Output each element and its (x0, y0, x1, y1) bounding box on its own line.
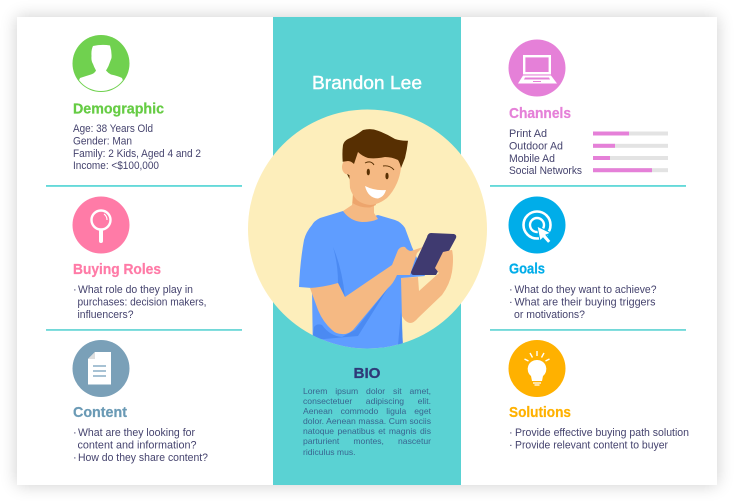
questions text: content and information? (78, 440, 196, 452)
heading: Solutions (509, 404, 571, 421)
bio paragraph: consectetuer adipiscing elit. (303, 396, 431, 406)
solutions text: Provide effective buying path solution (515, 427, 689, 439)
hand on tablet (435, 250, 453, 283)
section: channels (508, 40, 668, 177)
questions text (73, 427, 208, 464)
section: buying roles (72, 196, 206, 321)
icon: person (72, 35, 130, 95)
neck (343, 194, 378, 222)
channel labels: Social Networks (509, 165, 582, 177)
solutions text: · (509, 427, 513, 439)
details text: Family: 2 Kids, Aged 4 and 2 (73, 148, 201, 160)
section: content (72, 340, 208, 464)
channel labels: Mobile Ad (509, 153, 555, 165)
portrait circle with character (248, 110, 487, 360)
questions text: What are their buying triggers (514, 296, 656, 308)
icon: document (72, 340, 130, 397)
questions text: · (509, 284, 513, 296)
bio paragraph: Aenean commodo ligula eget (303, 406, 431, 416)
section: demographic (72, 35, 201, 172)
channel labels: Outdoor Ad (509, 140, 563, 152)
rear arm (400, 250, 453, 323)
bio paragraph: dolor. Aenean massa. Cum sociis (303, 416, 431, 426)
questions text (73, 284, 206, 321)
heading: Demographic (73, 100, 164, 118)
questions text: What do they want to achieve? (514, 284, 656, 296)
tablet (411, 233, 456, 275)
questions text: · (509, 296, 513, 308)
questions text: What role do they play in (78, 284, 193, 296)
name heading: Brandon Lee (312, 72, 422, 93)
heading: Content (73, 404, 127, 421)
details text: Income: <$100,000 (73, 160, 159, 172)
front arm (310, 247, 423, 334)
bio paragraph: Lorem ipsum dolor sit amet, (303, 386, 431, 396)
face (349, 150, 402, 205)
section: solutions (508, 340, 689, 452)
heading: Buying Roles (73, 261, 161, 278)
solutions text: · (509, 440, 513, 452)
questions text: · (73, 452, 77, 464)
details text (73, 123, 201, 172)
shirt shading (313, 247, 403, 345)
icon: laptop (508, 40, 566, 96)
questions text: How do they share content? (78, 452, 208, 464)
solutions text (509, 427, 689, 452)
heading: Channels (509, 105, 571, 122)
hair (342, 129, 408, 168)
center teal column (273, 17, 461, 485)
shirt (299, 211, 425, 360)
bio paragraph: natoque penatibus et magnis dis (303, 426, 431, 436)
questions text: · (73, 427, 77, 439)
channel labels (509, 128, 582, 177)
questions text: or motivations? (514, 309, 585, 321)
eyes (367, 169, 370, 175)
bio paragraph (303, 386, 431, 457)
bio paragraph: parturient montes, nascetur (303, 436, 431, 446)
details text: Gender: Man (73, 136, 132, 148)
ear (342, 161, 350, 174)
icon: target cursor (508, 196, 566, 254)
section: goals (508, 196, 656, 321)
questions text: purchases: decision makers, (78, 296, 206, 308)
heading: Goals (509, 260, 545, 278)
questions text: What are they looking for (78, 427, 195, 439)
questions text: influencers? (78, 309, 134, 321)
bio paragraph: ridiculus mus. (303, 447, 356, 457)
icon: magnifier (72, 196, 130, 254)
bar chart (593, 132, 668, 172)
questions text (509, 284, 656, 321)
BIO heading: BIO (354, 365, 381, 382)
smile (365, 186, 386, 198)
details text: Age: 38 Years Old (73, 123, 153, 135)
channel labels: Print Ad (509, 128, 547, 140)
icon: light bulb (508, 340, 566, 397)
questions text: · (73, 284, 77, 296)
solutions text: Provide relevant content to buyer (515, 440, 668, 452)
